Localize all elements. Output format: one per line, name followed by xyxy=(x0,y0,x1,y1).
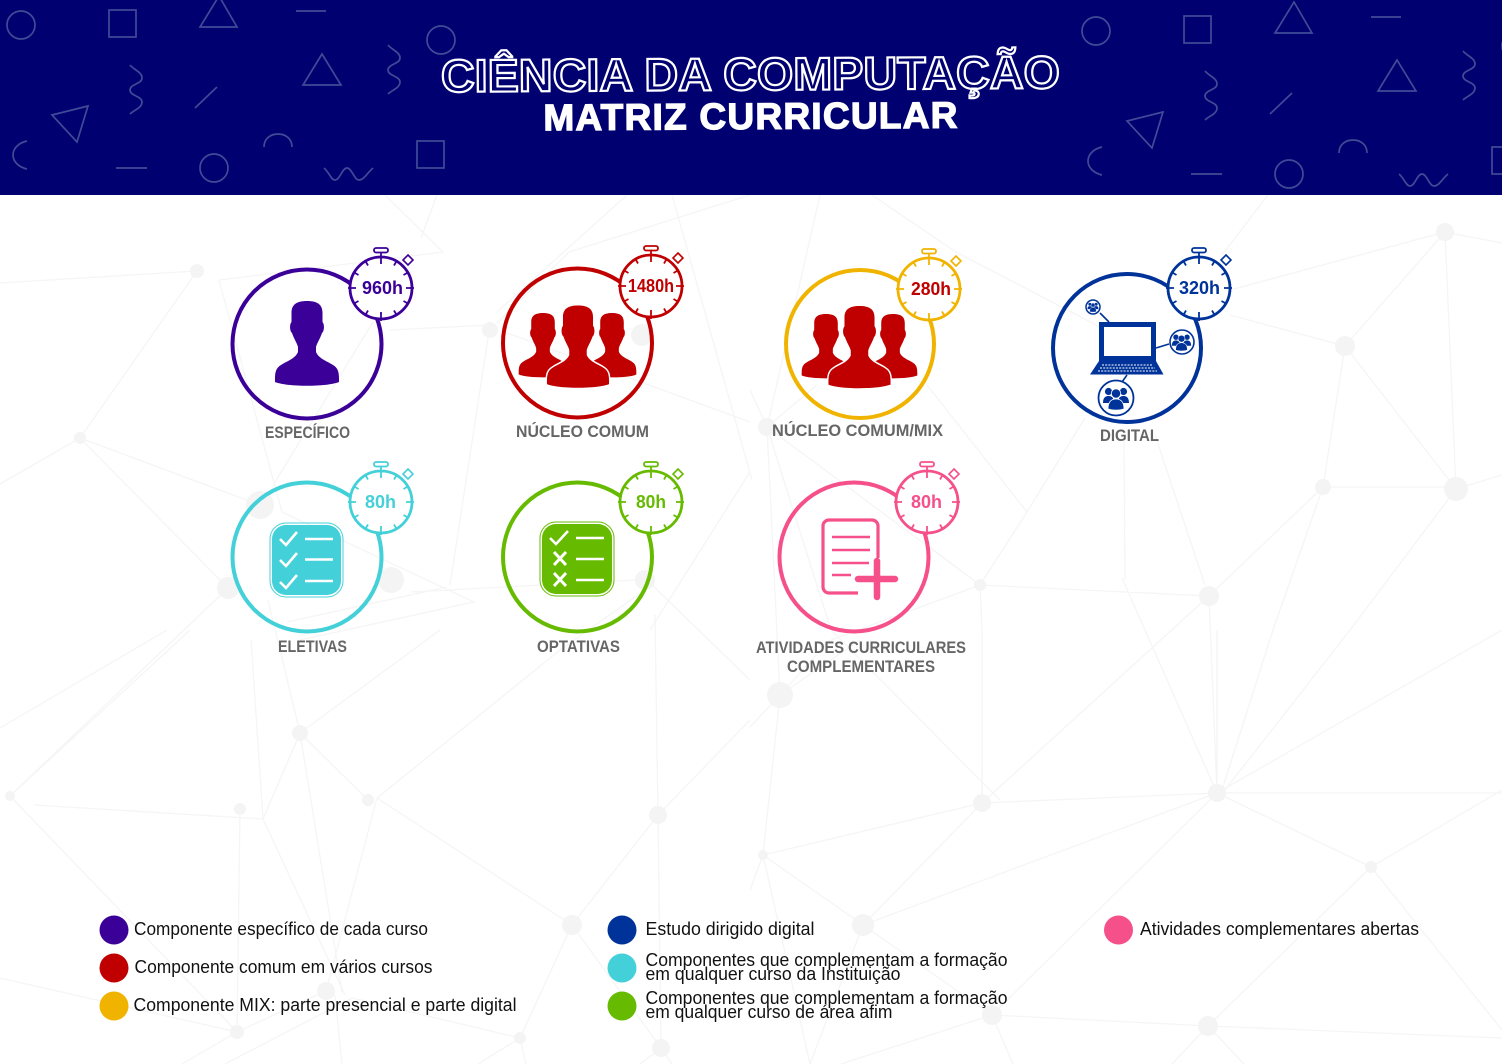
label: atividades curriculares complementares: ATIVIDADES CURRICULARES xyxy=(756,638,966,657)
legend item: atividades: Atividades complementares abertas xyxy=(1140,919,1419,939)
panel: optativas xyxy=(503,462,684,656)
legend item: mix xyxy=(100,992,516,1020)
legend xyxy=(100,916,1419,1022)
icon: document with plus xyxy=(823,520,895,597)
panel: header banner xyxy=(0,0,1502,195)
panel: digital xyxy=(1053,248,1232,445)
legend item: optativas: em qualquer curso de área afim xyxy=(646,1002,892,1022)
stopwatch: 80h: 80h xyxy=(911,492,942,512)
label: núcleo comum/mix: NÚCLEO COMUM/MIX xyxy=(772,421,944,440)
stopwatch: 80h xyxy=(348,462,414,535)
legend item: mix: Componente MIX: parte presencial e parte digital xyxy=(134,995,516,1015)
legend item: optativas: Componentes que complementam a formação xyxy=(646,988,1008,1008)
icon: laptop with connected groups xyxy=(1086,300,1194,416)
icon: group of people xyxy=(802,306,917,388)
label: optativas: OPTATIVAS xyxy=(537,637,620,656)
stopwatch: 280h: 280h xyxy=(911,279,951,299)
stopwatch: 80h xyxy=(894,462,960,535)
legend item: comum xyxy=(100,954,432,982)
icon: checklist xyxy=(270,523,343,597)
legend item: comum: Componente comum em vários cursos xyxy=(134,957,432,977)
stopwatch: 80h: 80h xyxy=(365,492,396,512)
panel: eletivas xyxy=(232,462,414,656)
stopwatch: 80h: 80h xyxy=(636,492,666,512)
legend item: eletivas: em qualquer curso da Instituição xyxy=(646,964,900,984)
label: eletivas: ELETIVAS xyxy=(278,637,347,656)
panel: núcleo comum/mix xyxy=(772,249,962,440)
label: núcleo comum: NÚCLEO COMUM xyxy=(516,422,649,441)
legend item: eletivas xyxy=(608,950,1008,984)
stopwatch: 80h xyxy=(618,462,684,535)
panel: atividades curriculares complementares xyxy=(756,462,966,676)
stopwatch: 320h: 320h xyxy=(1179,278,1220,298)
stopwatch: 960h xyxy=(348,248,414,321)
stopwatch: 280h xyxy=(896,249,962,322)
panel: núcleo comum xyxy=(503,246,684,441)
legend item: específico: Componente específico de cada curso xyxy=(134,919,428,939)
stopwatch: 1480h xyxy=(618,246,684,319)
label: específico: ESPECÍFICO xyxy=(265,423,350,442)
legend item: atividades xyxy=(1104,916,1419,944)
panel: específico xyxy=(232,248,414,442)
label: digital: DIGITAL xyxy=(1100,426,1159,445)
subtitle: MATRIZ CURRICULAR xyxy=(543,95,958,138)
label: atividades curriculares complementares: COMPLEMENTARES xyxy=(787,657,935,676)
icon: group of people xyxy=(519,306,636,388)
stopwatch: 1480h: 1480h xyxy=(628,276,674,296)
legend item: específico xyxy=(100,916,428,944)
stopwatch: 960h: 960h xyxy=(362,278,403,298)
legend item: eletivas: Componentes que complementam a formação xyxy=(646,950,1008,970)
stopwatch: 320h xyxy=(1166,248,1232,321)
label: atividades curriculares complementares xyxy=(756,638,966,676)
legend item: optativas xyxy=(608,988,1008,1022)
title: CIÊNCIA DA COMPUTAÇÃO xyxy=(441,46,1060,102)
icon: person xyxy=(275,301,339,386)
icon: checklist with crosses xyxy=(540,522,614,596)
legend item: digital: Estudo dirigido digital xyxy=(646,919,814,939)
legend item: digital xyxy=(608,916,814,944)
